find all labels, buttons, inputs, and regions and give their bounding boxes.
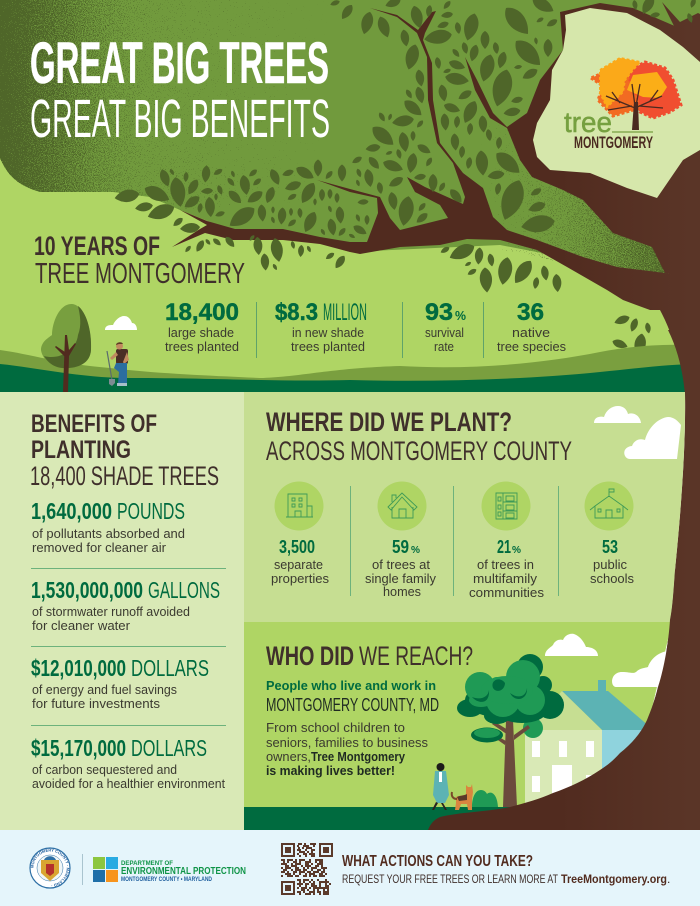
benefit: carbon dollars: avoided for a healthier environment <box>32 776 225 791</box>
stat: single family homes: single family <box>365 571 436 586</box>
tree trunk <box>428 280 700 830</box>
heading: benefits: BENEFITS OF <box>31 410 157 438</box>
icon: small tree <box>41 304 91 392</box>
stat: public schools: schools <box>590 571 634 586</box>
heading: where <box>266 407 572 466</box>
heading: benefits: PLANTING <box>31 436 131 464</box>
benefit: pounds: of pollutants absorbed and <box>32 526 185 541</box>
heading: who: WE REACH? <box>359 641 473 671</box>
text block: people: From school children to <box>266 720 405 735</box>
stat: multifamily communities: communities <box>469 585 545 600</box>
logo: department of environmental protection <box>93 857 246 883</box>
QR code <box>281 844 332 894</box>
heading: benefits: 18,400 SHADE TREES <box>30 461 219 491</box>
title: GREAT BIG BENEFITS <box>30 89 330 149</box>
logo: county seal: MONTGOMERY COUNTY · MARYLAND · <box>30 848 70 886</box>
icon: clouds <box>594 406 681 459</box>
benefit: carbon dollars: DOLLARS <box>131 735 207 761</box>
heading: who: WHO DID <box>266 641 354 671</box>
call to action <box>342 853 670 886</box>
heading: who <box>266 641 473 671</box>
stat: single family homes: of trees at <box>372 557 430 572</box>
logo: department of environmental protection: ENVIRONMENTAL PROTECTION <box>121 866 246 877</box>
stats band: MILLION <box>323 299 367 326</box>
stat: 18,400 <box>165 299 239 354</box>
stat: 93%: survival <box>425 325 464 340</box>
icon: cloud <box>105 316 137 330</box>
stat: single family homes: % <box>411 545 420 556</box>
stat: $8.3 million: in new shade <box>292 325 364 340</box>
stat: $8.3 million: trees planted <box>291 339 365 354</box>
stat: public schools: public <box>593 557 627 572</box>
trunk front <box>428 570 700 830</box>
benefit: energy dollars <box>31 655 209 711</box>
benefit: gallons: for cleaner water <box>32 618 131 633</box>
stat: multifamily communities: multifamily <box>473 571 538 586</box>
stat: 36: native <box>512 325 550 340</box>
footer <box>0 830 700 906</box>
illustration: bush <box>472 790 498 807</box>
stat: multifamily communities: 21 <box>497 537 511 557</box>
heading: where: ACROSS MONTGOMERY COUNTY <box>266 436 572 466</box>
benefit: energy dollars: DOLLARS <box>131 655 209 681</box>
text block: people <box>266 679 439 778</box>
benefit: energy dollars: of energy and fuel savings <box>32 682 177 697</box>
sky opening behind logo <box>533 8 700 198</box>
benefit: gallons: of stormwater runoff avoided <box>32 604 190 619</box>
benefit: gallons <box>31 577 220 633</box>
stat: multifamily communities <box>469 482 545 600</box>
heading: benefits <box>30 410 219 491</box>
stat: separate properties <box>271 482 329 586</box>
panel: who did we reach <box>244 622 672 830</box>
figure: gardener with shovel <box>107 342 129 386</box>
benefit: pounds: 1,640,000 <box>31 498 112 524</box>
benefit: carbon dollars <box>31 735 225 791</box>
stat: 36: tree species <box>497 339 566 354</box>
stat: multifamily communities: % <box>512 545 521 556</box>
text block: people: People who live and work in <box>266 679 436 693</box>
tree branches <box>172 2 700 310</box>
heading: 10 years <box>34 231 245 290</box>
stat: 93%: 93 <box>425 299 453 326</box>
stat: 36: 36 <box>517 299 544 326</box>
benefit: pounds: removed for cleaner air <box>32 540 167 555</box>
stat: single family homes: homes <box>383 584 421 599</box>
stat: $8.3 million <box>275 299 367 354</box>
benefit: gallons: GALLONS <box>148 577 220 603</box>
icon: clouds <box>545 634 668 687</box>
call to action: . <box>667 872 670 886</box>
stats band <box>165 299 566 358</box>
benefit: pounds: POUNDS <box>117 498 185 524</box>
stat: $8.3 million: $8.3 <box>275 299 318 326</box>
title: GREAT BIG TREES <box>30 31 329 96</box>
stat: 18,400: large shade <box>168 325 234 340</box>
panel: benefits of planting <box>0 392 244 830</box>
stat: separate properties: properties <box>271 571 329 586</box>
logo: Tree Montgomery: tree <box>564 107 612 139</box>
heading: where: WHERE DID WE PLANT? <box>266 407 512 437</box>
stat: public schools <box>584 482 634 586</box>
title <box>30 31 330 149</box>
stat: single family homes: 59 <box>392 537 409 557</box>
benefit: carbon dollars: of carbon sequestered and <box>32 762 177 777</box>
stat: 93% <box>425 299 466 354</box>
call to action: REQUEST YOUR FREE TREES OR LEARN MORE AT <box>342 872 558 886</box>
text block: people: seniors, families to business <box>266 735 428 750</box>
logo: Tree Montgomery <box>564 58 681 152</box>
benefit: carbon dollars: $15,170,000 <box>31 735 126 761</box>
stat: separate properties: separate <box>274 557 323 572</box>
text block: people: owners, <box>266 749 311 764</box>
text block: people: MONTGOMERY COUNTY, MD <box>266 695 439 715</box>
illustration: house <box>525 680 652 807</box>
illustration: dog <box>452 784 473 810</box>
benefit: pounds <box>31 498 185 555</box>
text block: people: Tree Montgomery <box>311 749 406 764</box>
trunk overlay at hills <box>668 330 700 395</box>
benefit: energy dollars: for future investments <box>32 696 161 711</box>
logo: department of environmental protection: DEPARTMENT OF <box>121 860 173 867</box>
benefit: energy dollars: $12,010,000 <box>31 655 126 681</box>
heading: 10 years: TREE MONTGOMERY <box>35 258 245 290</box>
call to action: WHAT ACTIONS CAN YOU TAKE? <box>342 853 533 870</box>
illustration: large tree <box>457 654 564 807</box>
benefit: gallons: 1,530,000,000 <box>31 577 143 603</box>
stat: 93%: % <box>455 308 466 323</box>
stat: 93%: rate <box>434 339 454 354</box>
heading: 10 years: 10 YEARS OF <box>34 231 160 261</box>
call to action: TreeMontgomery.org <box>561 872 667 886</box>
stat: 36 <box>497 299 566 354</box>
stat: 18,400: 18,400 <box>165 299 239 326</box>
leaves <box>114 0 697 370</box>
tree canopy <box>0 0 700 290</box>
stat: separate properties: 3,500 <box>279 537 315 557</box>
illustration: person walking <box>432 763 449 810</box>
background: sky <box>0 0 700 400</box>
logo: Tree Montgomery: MONTGOMERY <box>574 133 653 152</box>
stat: single family homes <box>365 482 436 599</box>
panel: where did we plant <box>244 392 685 622</box>
logo: department of environmental protection: MONTGOMERY COUNTY • MARYLAND <box>121 877 213 883</box>
stat: 18,400: trees planted <box>165 339 239 354</box>
hills <box>0 345 700 392</box>
text block: people: is making lives better! <box>266 763 395 778</box>
stat: multifamily communities: of trees in <box>477 557 534 572</box>
stat: public schools: 53 <box>602 537 618 557</box>
